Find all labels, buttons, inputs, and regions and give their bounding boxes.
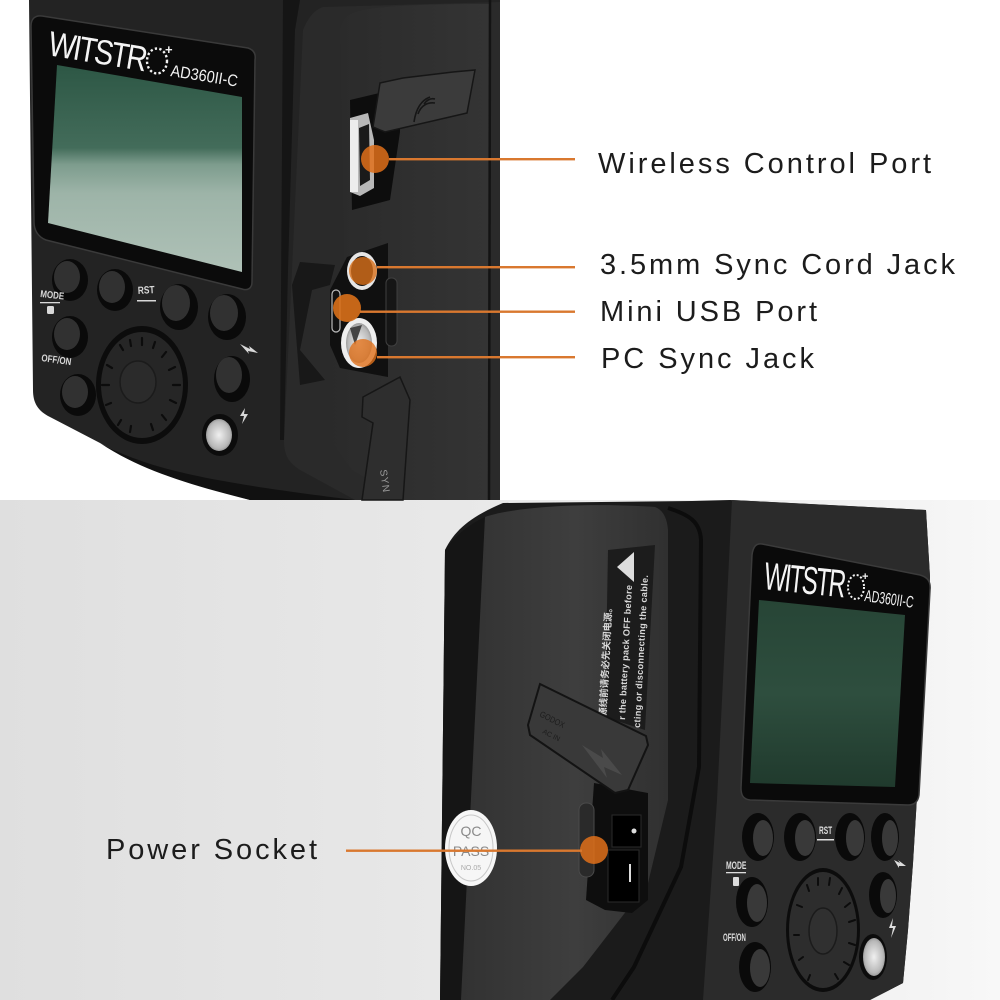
- bottom panel: grey background: [0, 500, 1000, 1000]
- warning sticker: 源线前请务必先关闭电源。: [597, 603, 615, 717]
- brand logo: AD360II-C: [864, 586, 915, 611]
- left edge strip: [440, 517, 485, 1000]
- slot detail: [386, 278, 397, 346]
- callout: power socket: Power Socket: [106, 834, 317, 866]
- silver test button: [202, 414, 238, 456]
- rubber cover: [528, 684, 648, 793]
- LCD screen: [48, 65, 242, 272]
- brand logo: [762, 554, 915, 611]
- callout: 3.5mm sync cord jack: [349, 249, 956, 285]
- button labels: [723, 824, 906, 943]
- brand logo: +: [862, 571, 868, 583]
- wireless port recess: [350, 88, 400, 210]
- callout: wireless control port: [361, 145, 931, 180]
- wireless port metal: [350, 113, 374, 196]
- button labels: [40, 284, 258, 424]
- grip edge: [612, 508, 701, 1000]
- button labels: MODE: [726, 859, 746, 871]
- warning sticker: cting or disconnecting the cable.: [632, 575, 650, 728]
- side panel: [461, 505, 668, 1000]
- QC pass sticker: [445, 810, 497, 886]
- callout: PC sync jack: [349, 339, 814, 375]
- grip ridge: [292, 262, 335, 385]
- device body: [440, 500, 930, 1000]
- control buttons: [52, 259, 250, 416]
- callout: mini USB port: [333, 294, 817, 328]
- bottom flash unit: [440, 500, 930, 1000]
- button labels: MODE: [40, 288, 65, 302]
- power socket pins: [608, 815, 641, 902]
- control buttons: [736, 813, 899, 992]
- rubber port cover: [373, 70, 475, 132]
- warning sticker: r the battery pack OFF before: [617, 585, 634, 720]
- button labels: OFF/ON: [41, 352, 72, 367]
- button labels: RST: [138, 284, 155, 297]
- display bezel: [31, 16, 255, 290]
- 3.5mm jack: [347, 252, 377, 290]
- silver test button: [859, 934, 887, 980]
- QC pass sticker: PASS: [453, 843, 489, 859]
- callout: wireless control port: Wireless Control Port: [598, 148, 931, 180]
- rubber cover: GODOX: [538, 709, 567, 730]
- callout: 3.5mm sync cord jack: 3.5mm Sync Cord Jack: [600, 249, 956, 281]
- QC pass sticker: QC: [460, 823, 482, 839]
- top flash unit: [29, 0, 500, 500]
- brand logo: AD360II-C: [169, 62, 239, 91]
- callout: power socket: [106, 834, 608, 866]
- control dial: [786, 868, 860, 992]
- brand logo: WITSTR: [46, 24, 150, 79]
- button labels: OFF/ON: [723, 931, 746, 943]
- rubber cover: AC IN: [541, 729, 561, 743]
- right edge line: [489, 0, 490, 500]
- lower base shadow: [100, 443, 355, 500]
- device body: [29, 0, 500, 500]
- callout: PC sync jack: PC Sync Jack: [601, 343, 814, 375]
- callout: mini USB port: Mini USB Port: [600, 296, 817, 328]
- lower rubber cover: [362, 377, 410, 500]
- dark groove beside grip: [280, 0, 300, 440]
- display bezel: [741, 544, 930, 805]
- PC sync jack: [341, 318, 377, 368]
- socket slot: [579, 803, 594, 877]
- brand logo: +: [165, 42, 173, 57]
- top panel: white background: [0, 0, 1000, 500]
- button labels: RST: [819, 824, 833, 836]
- QC pass sticker: NO.05: [461, 865, 481, 872]
- side panel: [325, 4, 490, 500]
- side grip band: [284, 2, 500, 500]
- LCD screen: [750, 600, 905, 787]
- brand logo: WITSTR: [762, 554, 847, 606]
- port recess: [586, 783, 648, 913]
- sync ports recess: [330, 243, 388, 377]
- warning sticker: [597, 545, 655, 730]
- brand logo: [46, 24, 239, 91]
- control panel body: [703, 500, 930, 1000]
- lower rubber cover: SYN: [377, 469, 391, 494]
- control dial: [96, 326, 188, 444]
- mini USB port: [332, 290, 340, 332]
